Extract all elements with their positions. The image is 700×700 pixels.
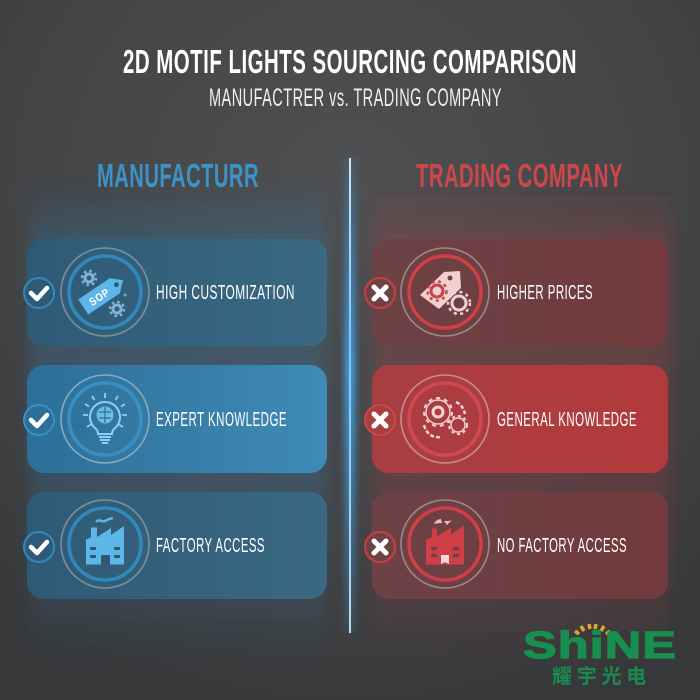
icon: price tag and gears — [61, 248, 149, 336]
logo wordmark: ShiNE — [523, 625, 677, 667]
check badge — [24, 532, 54, 562]
cross badge — [365, 405, 395, 435]
icon: factory — [401, 500, 489, 588]
cross badge — [365, 532, 395, 562]
blue column glow — [30, 185, 325, 660]
logo: shine — [523, 624, 677, 688]
panel: no factory access — [365, 492, 668, 599]
panel: high customization — [24, 239, 327, 346]
icon: gears and chain — [401, 375, 489, 463]
cross badge — [365, 278, 395, 308]
check badge — [24, 405, 54, 435]
logo chinese name: 耀宇光电 — [552, 665, 647, 688]
label: FACTORY ACCESS — [156, 535, 265, 557]
label: HIGH CUSTOMIZATION — [156, 282, 295, 304]
panel: factory access — [24, 492, 327, 599]
panel: higher prices — [365, 239, 668, 346]
panel: expert knowledge — [24, 365, 327, 473]
icon: price tag with gears — [401, 248, 489, 336]
subtitle: MANUFACTRER vs. TRADING COMPANY — [209, 84, 502, 112]
center divider — [345, 158, 355, 633]
icon: factory — [61, 500, 149, 588]
red column glow — [375, 185, 670, 660]
icon: light bulb with brain — [61, 375, 149, 463]
label: HIGHER PRICES — [497, 282, 593, 304]
heading: manufacturer: MANUFACTURR — [97, 157, 259, 194]
panel: general knowledge — [365, 365, 668, 473]
icon: price tag and gears: SOP — [87, 286, 112, 309]
label: EXPERT KNOWLEDGE — [156, 409, 287, 431]
logo sun rays — [575, 624, 610, 634]
check badge — [24, 278, 54, 308]
